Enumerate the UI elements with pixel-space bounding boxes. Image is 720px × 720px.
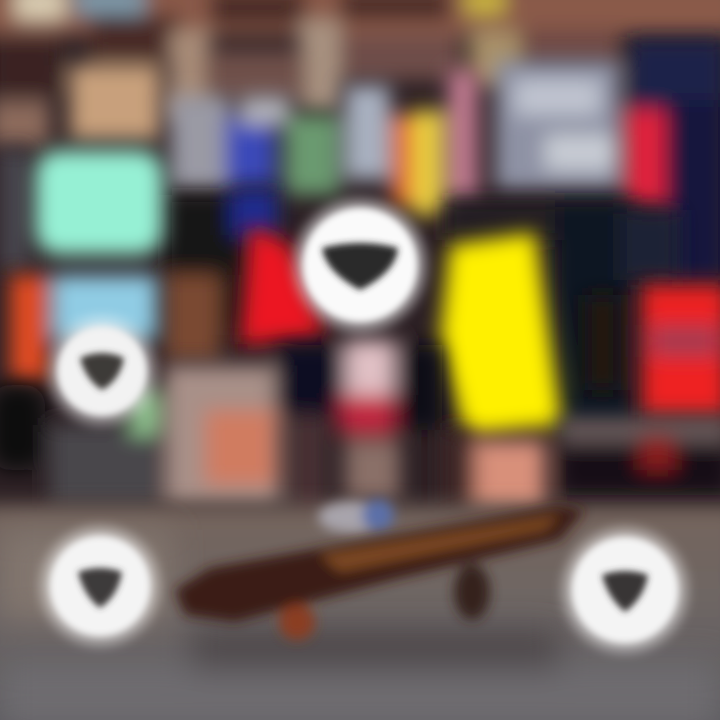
floor bbox=[0, 505, 720, 720]
ceiling and shelves bbox=[0, 0, 720, 145]
coloured garments bbox=[10, 150, 720, 435]
shoes bbox=[318, 499, 394, 533]
icon: upper-left heart badge bbox=[48, 317, 156, 425]
shorts and legs bbox=[0, 340, 720, 515]
skateboard bbox=[175, 505, 585, 640]
icon: lower-left heart badge bbox=[41, 527, 159, 645]
hanging shirts row bbox=[170, 40, 720, 280]
icon: large heart badge bbox=[294, 199, 426, 331]
icon: lower-right heart badge bbox=[563, 528, 687, 652]
dark lower rack bbox=[0, 150, 680, 430]
